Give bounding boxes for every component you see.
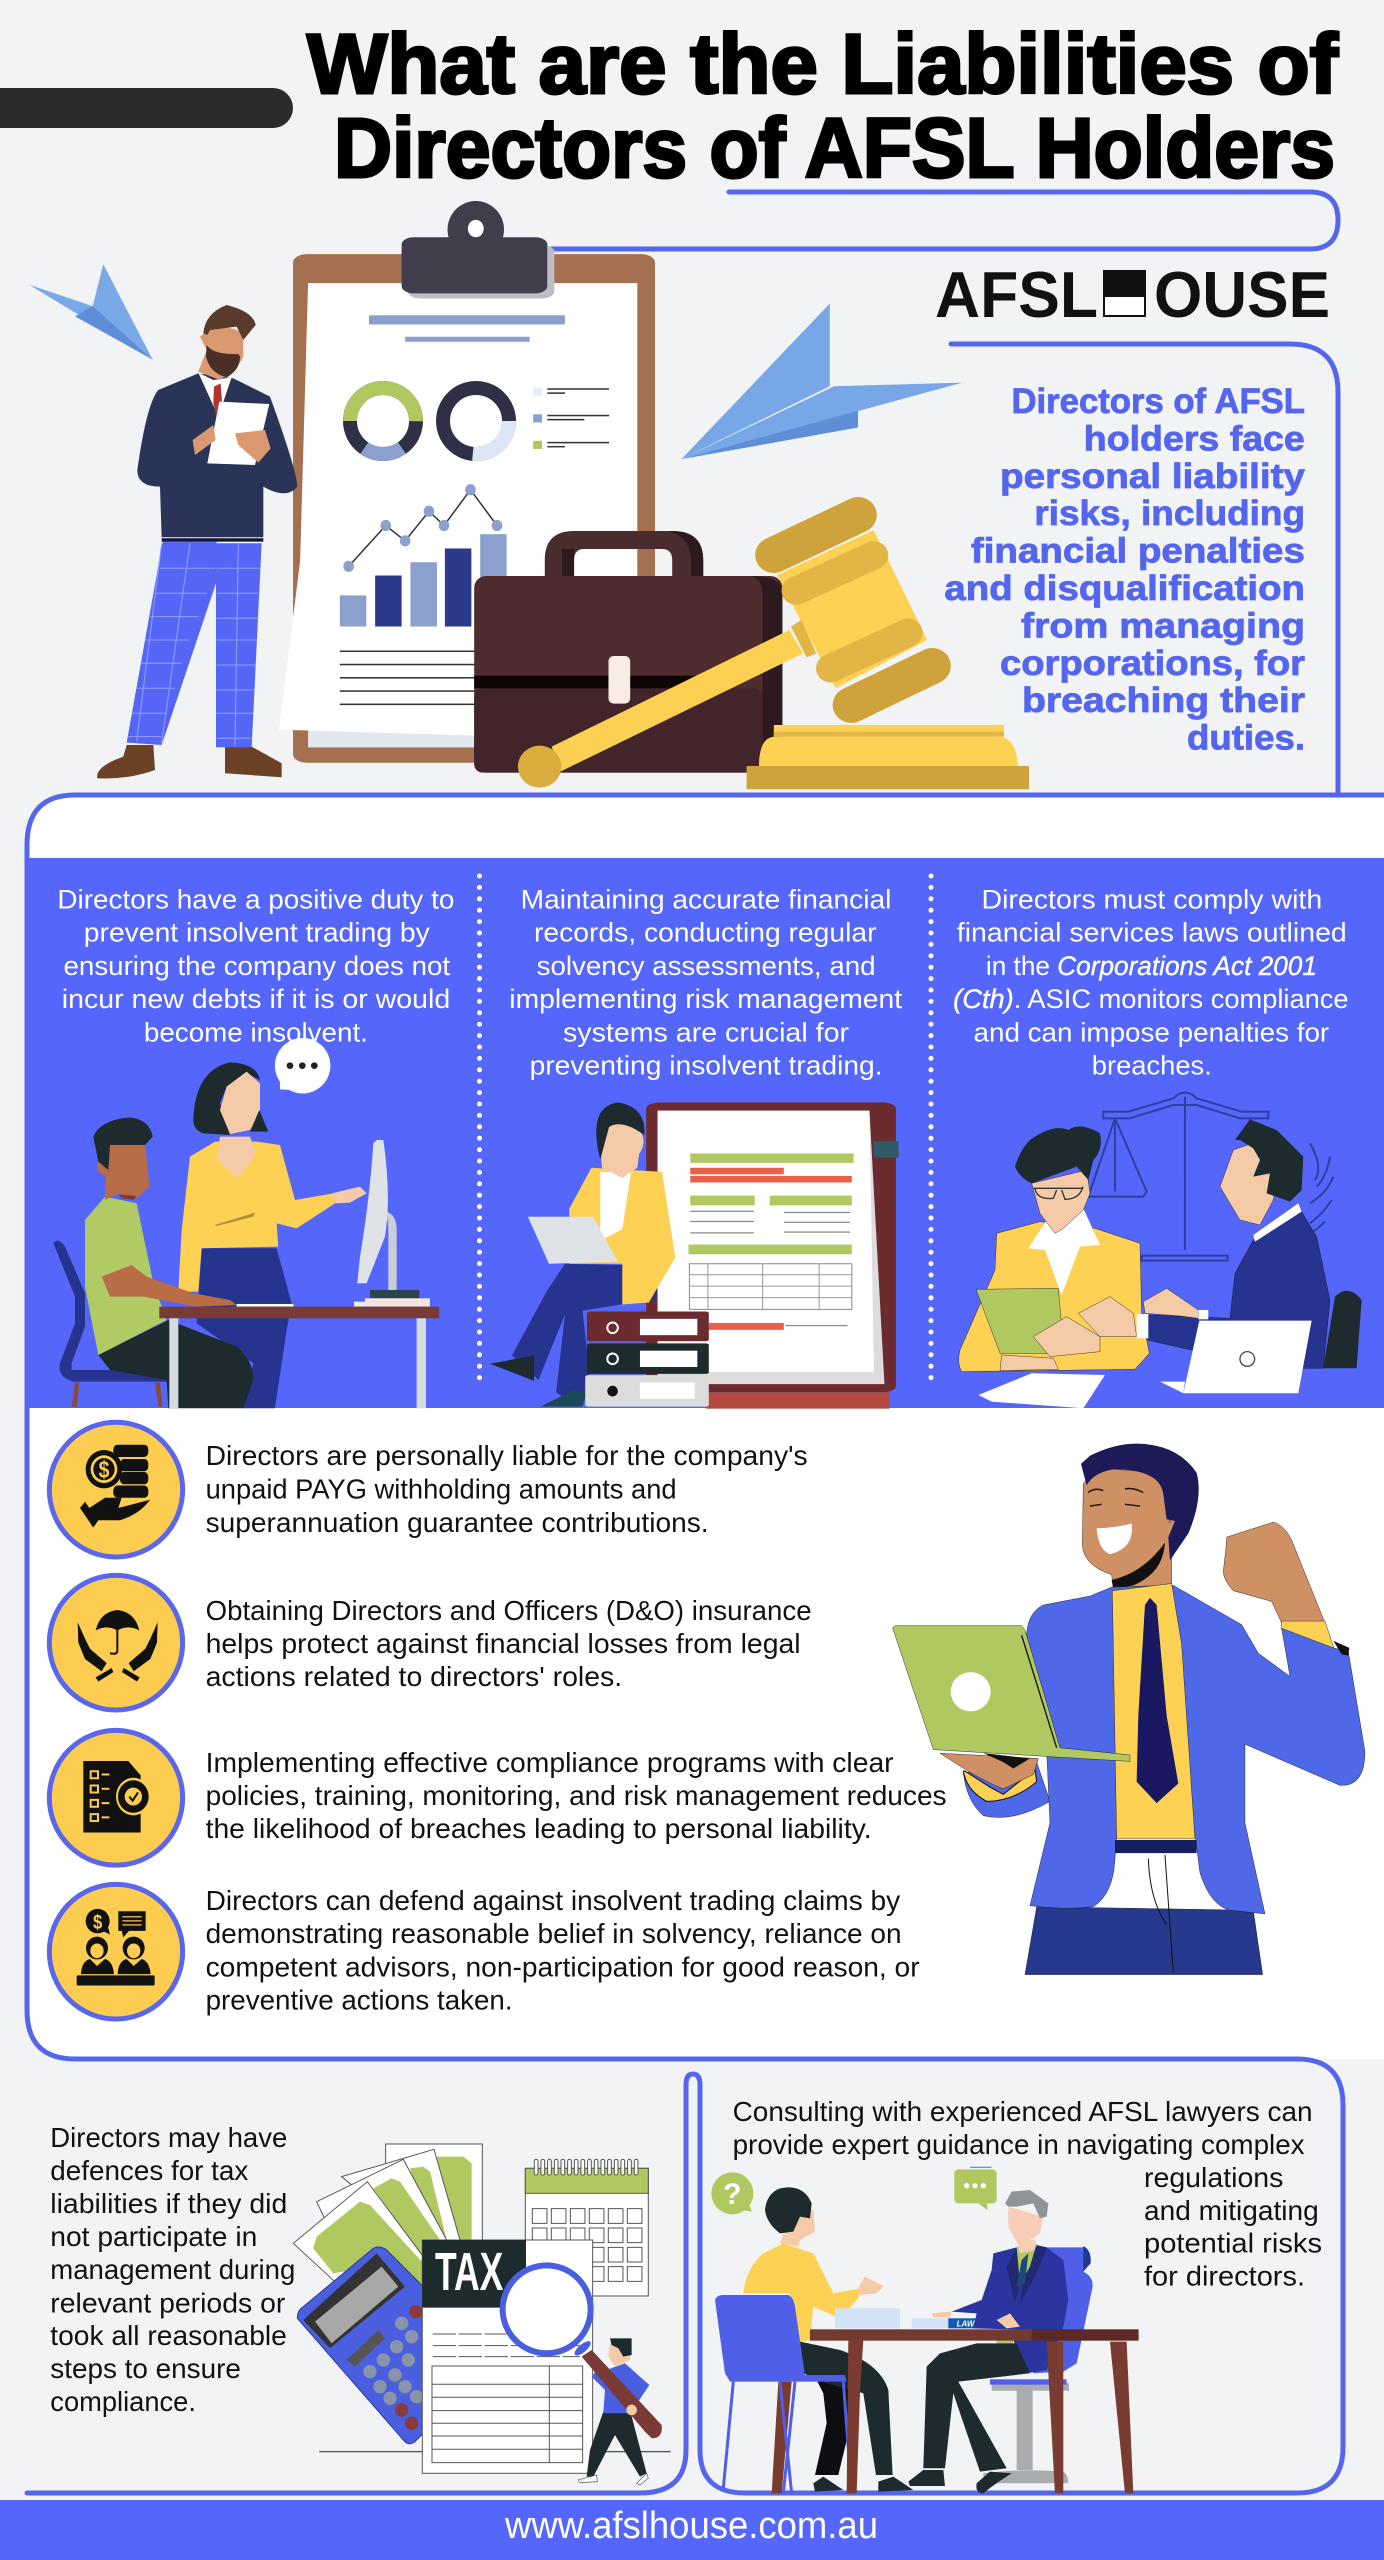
illustration: lawyers with scales of justice bbox=[959, 1092, 1362, 1408]
column 3 text: in the Corporations Act 2001 bbox=[986, 951, 1317, 981]
consulting lawyers text: provide expert guidance in navigating complex bbox=[733, 2129, 1305, 2160]
law book label: LAW bbox=[957, 2320, 976, 2329]
point 1 text: unpaid PAYG withholding amounts and bbox=[206, 1474, 677, 1504]
hero description text: Directors of AFSL bbox=[1012, 382, 1305, 421]
gavel bbox=[518, 515, 1029, 789]
point 3 text bbox=[206, 1747, 947, 1844]
hero description text bbox=[944, 382, 1306, 758]
point 3 text: Implementing effective compliance programs with clear bbox=[206, 1747, 894, 1778]
tax defences text: liabilities if they did bbox=[50, 2188, 287, 2219]
bottom frame stroke bbox=[27, 2059, 1343, 2493]
illustration: happy businessman with laptop bbox=[893, 1444, 1365, 1975]
hero description text: breaching their bbox=[1022, 681, 1305, 720]
title outline stroke bbox=[552, 192, 1338, 249]
column 1 text: Directors have a positive duty to bbox=[57, 884, 454, 914]
column 2 text bbox=[509, 884, 903, 1081]
icon: umbrella and hands bbox=[49, 1575, 183, 1710]
logo: AFSL House: AFSL bbox=[935, 258, 1098, 331]
column 2 text: preventing insolvent trading. bbox=[530, 1051, 883, 1081]
consulting lawyers text: regulations bbox=[1144, 2162, 1283, 2193]
column 3 text: breaches. bbox=[1092, 1051, 1212, 1081]
logo: AFSL House bbox=[935, 258, 1330, 331]
column 2 text: records, conducting regular bbox=[534, 918, 876, 948]
consulting lawyers text: Consulting with experienced AFSL lawyers can bbox=[733, 2096, 1313, 2127]
footer band with website: www.afslhouse.com.au bbox=[504, 2505, 878, 2547]
point 2 text: actions related to directors' roles. bbox=[206, 1661, 622, 1692]
logo: AFSL House: OUSE bbox=[1154, 258, 1330, 331]
donut chart right bbox=[443, 388, 509, 454]
title: Directors of AFSL Holders bbox=[334, 101, 1335, 195]
icon: coins in hand bbox=[49, 1422, 183, 1557]
column 2 text: solvency assessments, and bbox=[537, 951, 876, 981]
panel border stroke bbox=[27, 795, 1384, 2059]
point 4 text: preventive actions taken. bbox=[206, 1984, 513, 2016]
hero description text: personal liability bbox=[1000, 457, 1306, 496]
dotted column dividers bbox=[480, 876, 931, 1388]
hero description text: risks, including bbox=[1034, 494, 1305, 533]
donut chart left bbox=[337, 375, 429, 467]
consulting lawyers text bbox=[733, 2096, 1322, 2292]
small paper plane icon bbox=[29, 264, 153, 360]
point 3 text: policies, training, monitoring, and risk management reduces bbox=[206, 1780, 947, 1811]
column 2 text: Maintaining accurate financial bbox=[521, 884, 891, 914]
point 4 text: demonstrating reasonable belief in solvency, reliance on bbox=[206, 1918, 902, 1949]
hero description text: from managing bbox=[1021, 606, 1305, 645]
column 3 text: financial services laws outlined bbox=[957, 918, 1347, 948]
column 1 text: prevent insolvent trading by bbox=[84, 918, 430, 948]
question mark label: ? bbox=[723, 2178, 741, 2211]
consulting lawyers text: potential risks bbox=[1144, 2228, 1322, 2258]
point 2 text: helps protect against financial losses from legal bbox=[206, 1628, 801, 1659]
point 4 text: competent advisors, non-participation for good reason, or bbox=[206, 1952, 920, 1982]
tax defences text: took all reasonable bbox=[50, 2320, 287, 2351]
icon: coins in hand: $ bbox=[99, 1456, 109, 1483]
tax label: TAX bbox=[435, 2242, 503, 2302]
hero description text: corporations, for bbox=[1000, 644, 1305, 683]
footer band with website bbox=[0, 2500, 1384, 2560]
illustration: client meeting lawyer bbox=[711, 2167, 1139, 2493]
point 2 text: Obtaining Directors and Officers (D&O) insurance bbox=[206, 1595, 812, 1626]
illustration: tax, calculator, money and calendar bbox=[293, 2144, 671, 2485]
consulting lawyers text: and mitigating bbox=[1144, 2195, 1319, 2226]
clipboard with charts bbox=[279, 201, 655, 763]
dark title accent bar bbox=[0, 88, 293, 128]
icon: compliance checklist and gear bbox=[49, 1730, 183, 1865]
point 4 text: Directors can defend against insolvent trading claims by bbox=[206, 1885, 900, 1916]
tax defences text: management during bbox=[50, 2254, 295, 2285]
panel: main white panel bbox=[27, 795, 1384, 2059]
consulting lawyers text: for directors. bbox=[1144, 2260, 1305, 2292]
tax defences text: relevant periods or bbox=[50, 2288, 285, 2318]
panel: blue band background bbox=[27, 858, 1384, 1408]
hero description text: duties. bbox=[1187, 719, 1305, 758]
point 3 text: the likelihood of breaches leading to personal liability. bbox=[206, 1813, 872, 1844]
column 2 text: implementing risk management bbox=[509, 984, 903, 1014]
column 3 text bbox=[953, 884, 1349, 1081]
point 4 text bbox=[206, 1885, 920, 2016]
tax defences text: defences for tax bbox=[50, 2155, 248, 2186]
column 1 text: become insolvent. bbox=[144, 1017, 368, 1047]
column 2 text: systems are crucial for bbox=[563, 1017, 849, 1047]
title bbox=[307, 17, 1339, 195]
speech bubble overlay on column 1 text bbox=[275, 1038, 330, 1093]
illustration: woman and man at desk bbox=[53, 1038, 439, 1408]
title: What are the Liabilities of bbox=[307, 17, 1339, 111]
point 1 text: superannuation guarantee contributions. bbox=[206, 1507, 709, 1538]
illustration: person with report and binders bbox=[490, 1102, 899, 1409]
column 3 text: (Cth). ASIC monitors compliance bbox=[953, 984, 1349, 1014]
tax defences text: compliance. bbox=[50, 2386, 196, 2417]
column 1 text: ensuring the company does not bbox=[64, 951, 451, 981]
hero description text: and disqualification bbox=[944, 569, 1305, 608]
briefcase bbox=[474, 531, 782, 773]
businessman with beard bbox=[97, 305, 297, 779]
tax defences text: steps to ensure bbox=[50, 2353, 241, 2384]
hero outline stroke bbox=[951, 344, 1338, 800]
hero description text: holders face bbox=[1084, 419, 1305, 458]
large paper plane icon bbox=[681, 304, 962, 459]
column 1 text bbox=[57, 884, 454, 1047]
column 1 text: incur new debts if it is or would bbox=[62, 984, 450, 1014]
tax defences text: not participate in bbox=[50, 2221, 257, 2252]
icon: advisors talking: $ bbox=[93, 1911, 103, 1934]
icon: advisors talking bbox=[49, 1884, 183, 2019]
column 3 text: Directors must comply with bbox=[982, 884, 1322, 914]
column 3 text: and can impose penalties for bbox=[974, 1017, 1329, 1047]
tax defences text bbox=[50, 2122, 295, 2417]
tax defences text: Directors may have bbox=[50, 2122, 287, 2153]
point 1 text: Directors are personally liable for the company's bbox=[206, 1440, 808, 1471]
point 1 text bbox=[206, 1440, 808, 1538]
point 2 text bbox=[206, 1595, 812, 1692]
hero description text: financial penalties bbox=[971, 532, 1305, 571]
